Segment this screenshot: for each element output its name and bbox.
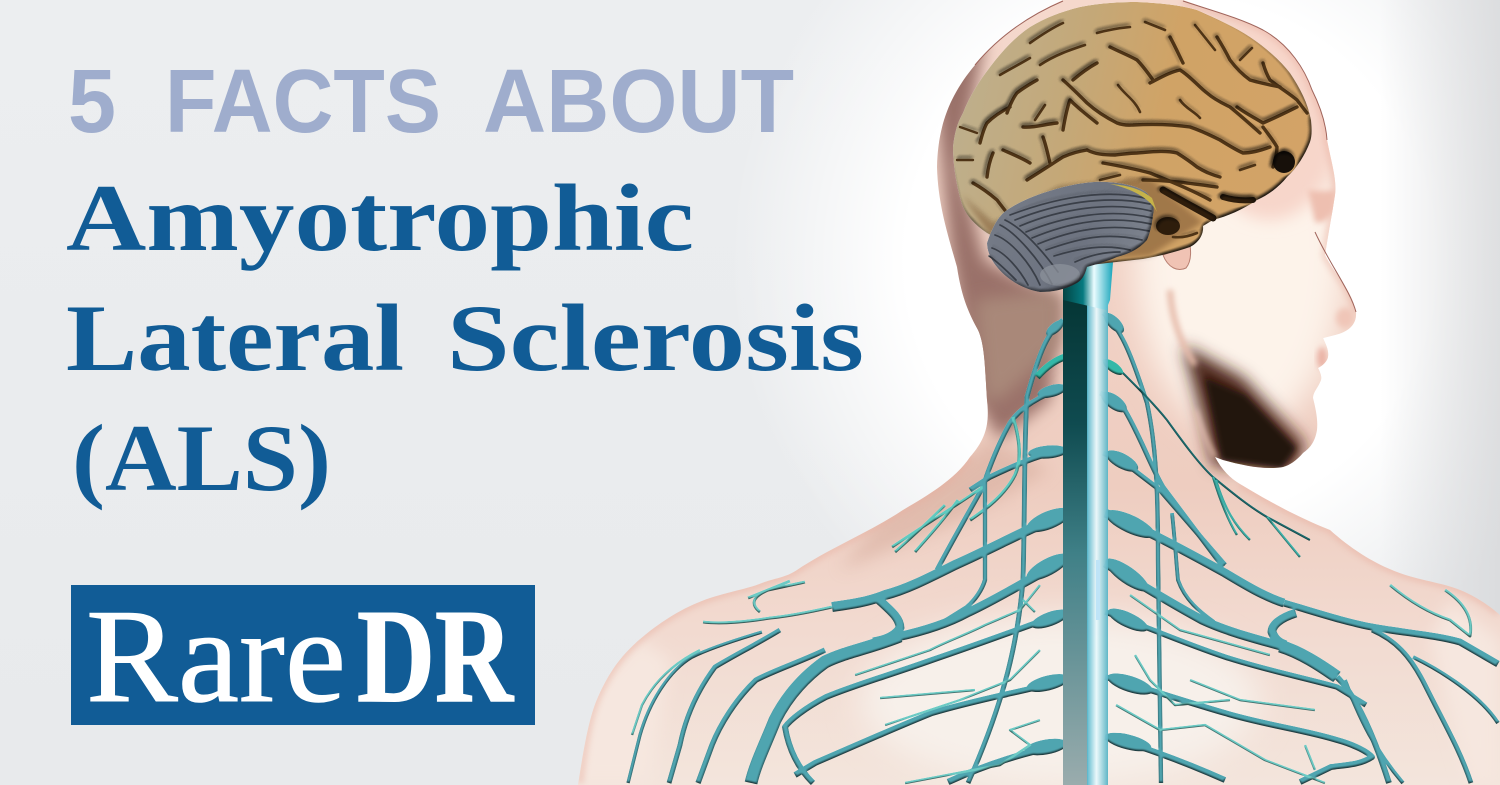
logo: RareDR: DR	[357, 582, 514, 730]
brain sulci	[957, 22, 1307, 237]
cerebellum folia	[989, 194, 1152, 285]
logo: RareDR	[71, 582, 535, 730]
right trunk branches	[1101, 504, 1498, 783]
left trunk branches	[628, 503, 1075, 783]
brain	[953, 2, 1312, 265]
neck nerves	[892, 310, 1310, 783]
temporal pole detail	[1156, 217, 1180, 235]
heading: disease name: (ALS)	[72, 405, 331, 511]
title: 5 facts about: ABOUT	[483, 52, 794, 152]
brain fissure	[1273, 151, 1295, 173]
title: 5 facts about	[68, 52, 794, 152]
heading: disease name: Lateral	[66, 285, 404, 391]
title: 5 facts about: 5	[68, 52, 116, 152]
jaw shadow	[1183, 345, 1305, 472]
spinal cord	[1063, 262, 1113, 785]
body silhouette	[570, 0, 1500, 785]
nerves	[628, 310, 1498, 783]
heading: disease name: Amyotrophic	[66, 165, 694, 271]
title: 5 facts about: FACTS	[165, 52, 441, 152]
ear lobe	[1163, 245, 1191, 269]
heading: disease name: Sclerosis	[447, 285, 864, 391]
cerebellum	[987, 182, 1154, 292]
heading: disease name	[66, 165, 864, 511]
logo: RareDR: Rare	[86, 582, 346, 730]
brainstem accent	[1110, 184, 1157, 212]
illustration: human head and back with nervous system	[570, 0, 1500, 785]
brain lower shadow	[962, 178, 1203, 262]
face contour lines	[975, 1, 1356, 312]
